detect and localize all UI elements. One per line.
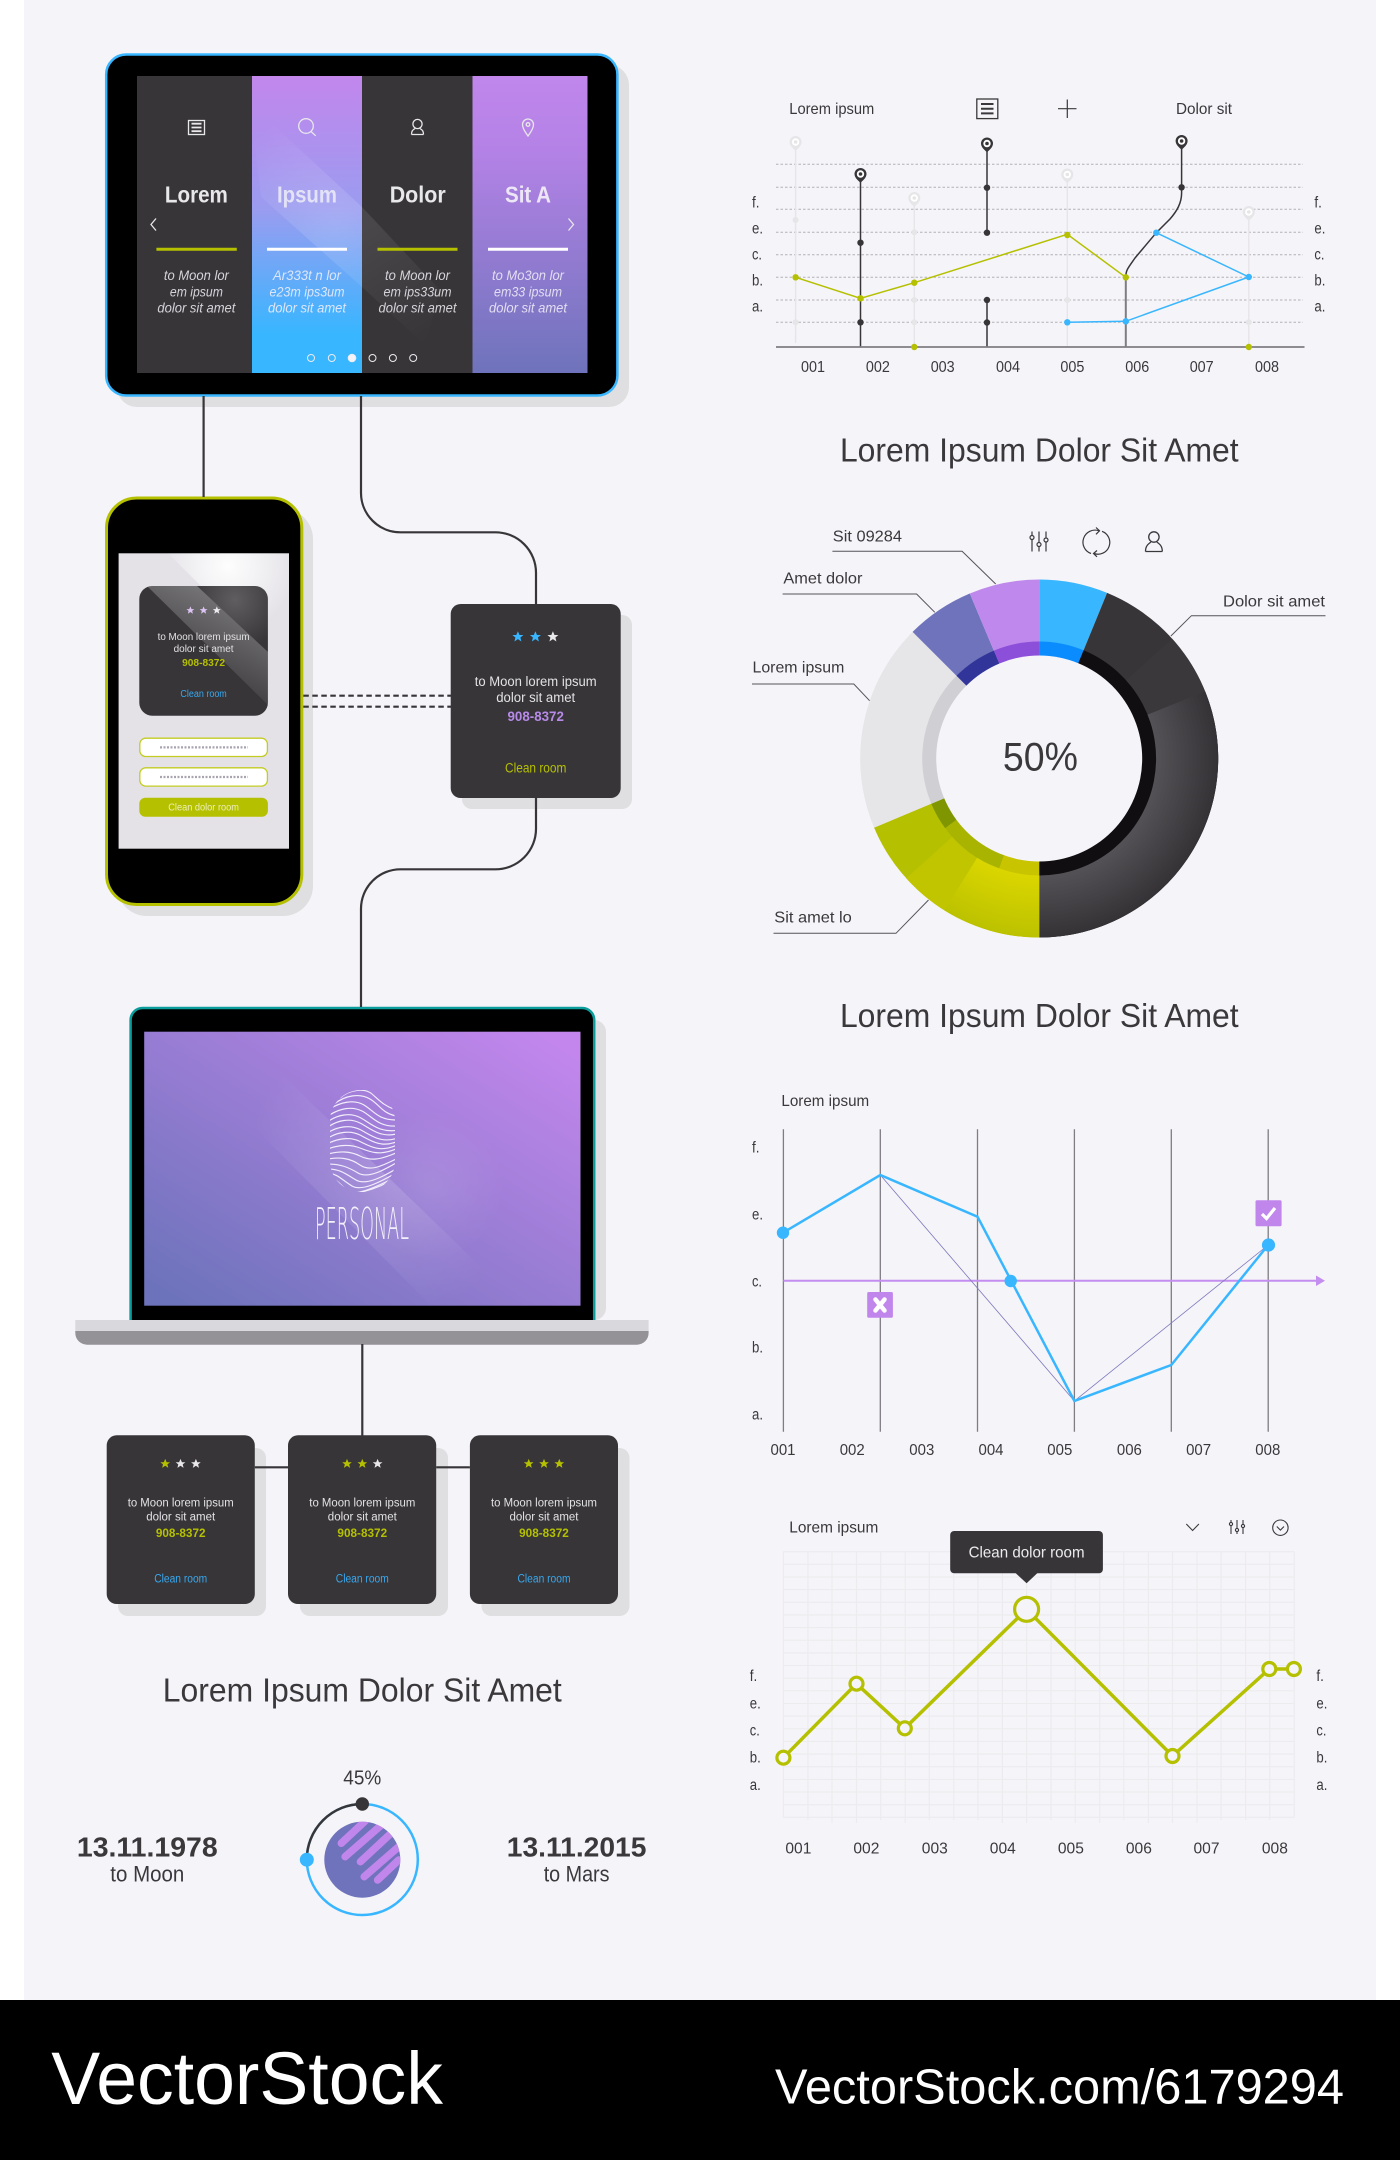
callout: Amet dolor: Amet dolor <box>783 570 863 587</box>
y axis labels: b. <box>750 1750 761 1767</box>
y axis labels: a. <box>1316 1777 1327 1794</box>
icon: person <box>1146 532 1162 552</box>
chart header label left: Lorem ipsum <box>789 101 874 118</box>
text: column 3 description <box>378 267 458 316</box>
title: left column: Lorem Ipsum Dolor Sit Amet <box>163 1673 562 1710</box>
x axis labels: 003 <box>909 1442 934 1459</box>
grid lines <box>776 164 1303 322</box>
y axis labels: c. <box>752 247 762 264</box>
x axis labels: 008 <box>1255 359 1279 376</box>
callout: Sit amet lo <box>774 900 928 933</box>
heading: Lorem column: Lorem <box>165 182 228 208</box>
lime data line <box>783 1609 1294 1758</box>
chart: donut <box>752 528 1326 938</box>
text: column 1 description: dolor sit amet <box>157 300 236 316</box>
text: column 2 description: e23m ips3um <box>270 284 345 300</box>
icon: chevron <box>1186 1524 1199 1530</box>
x axis labels: 002 <box>840 1442 865 1459</box>
stars <box>160 1459 201 1468</box>
heading: Sit A column: Sit A <box>505 182 551 208</box>
y axis labels: b. <box>752 1340 763 1357</box>
blue series line <box>1064 230 1252 325</box>
card text: 908-8372 <box>156 1528 206 1540</box>
text: column 4 description: em33 ipsum <box>494 284 562 300</box>
card text: dolor sit amet <box>328 1512 398 1524</box>
x axis labels <box>770 1442 1280 1459</box>
text: column 2 description: Ar333t n lor <box>272 267 342 283</box>
vertical grid lines <box>783 1129 1268 1432</box>
y axis labels <box>752 1139 763 1423</box>
card text: to Moon lorem ipsum <box>128 1498 234 1510</box>
chart: timeline pins <box>752 99 1325 376</box>
panel: tablet <box>106 54 629 407</box>
y axis labels: c. <box>750 1723 760 1740</box>
heading: Dolor column: Dolor <box>390 182 446 208</box>
tooltip: Clean dolor room <box>969 1544 1085 1561</box>
x axis labels: 007 <box>1190 359 1214 376</box>
x axis labels <box>785 1840 1288 1857</box>
text: end date <box>507 1832 646 1887</box>
donut segments <box>860 580 1218 938</box>
column divider rules <box>156 248 568 251</box>
x axis labels: 001 <box>785 1840 811 1857</box>
phone inner card <box>139 586 268 716</box>
x axis labels: 005 <box>1058 1840 1084 1857</box>
text: column 4 description: dolor sit amet <box>489 300 568 316</box>
text: column 3 description: to Moon lor <box>385 267 451 283</box>
baseline axis <box>776 346 1304 348</box>
arrow: threshold line <box>783 1276 1325 1286</box>
input field 1 <box>140 738 267 756</box>
x axis labels: 006 <box>1117 1442 1142 1459</box>
y axis labels <box>750 1668 1327 1794</box>
y axis labels: c. <box>1314 247 1324 264</box>
icon: search <box>299 119 316 136</box>
chart: lime line on grid <box>750 1519 1327 1857</box>
card text: 908-8372 <box>508 709 564 724</box>
text: column 1 description <box>157 267 236 316</box>
panel: card 3 <box>470 1435 630 1616</box>
x axis labels: 008 <box>1262 1840 1288 1857</box>
x axis labels: 007 <box>1194 1840 1220 1857</box>
card text: Clean room <box>180 689 227 700</box>
card text <box>128 1498 234 1585</box>
percent label: 45% <box>343 1767 382 1789</box>
y axis labels: b. <box>752 272 763 289</box>
panel: phone <box>106 498 313 916</box>
text: start date: to Moon <box>110 1862 184 1887</box>
x axis labels: 001 <box>801 359 825 376</box>
chart label: Lorem ipsum <box>781 1093 869 1110</box>
y axis labels <box>752 195 1325 315</box>
x axis labels: 002 <box>853 1840 879 1857</box>
x axis labels: 006 <box>1125 359 1149 376</box>
x axis labels: 005 <box>1047 1442 1072 1459</box>
icon: person <box>412 119 424 134</box>
blue data line <box>783 1175 1268 1401</box>
callout: Dolor sit amet: Dolor sit amet <box>1223 594 1326 611</box>
text: column 2 description <box>268 267 347 316</box>
card text: 908-8372 <box>337 1528 387 1540</box>
card text <box>475 674 597 776</box>
card text: dolor sit amet <box>496 690 575 705</box>
y axis labels: f. <box>1316 1668 1324 1685</box>
card text: Clean room <box>336 1573 389 1585</box>
callout: Sit 09284 <box>832 529 996 584</box>
card text <box>158 632 250 700</box>
x axis labels: 001 <box>770 1442 796 1459</box>
callout: Lorem ipsum: Lorem ipsum <box>752 660 844 677</box>
data points <box>777 1597 1300 1764</box>
icon: menu <box>977 99 998 119</box>
icon: left arrow <box>151 218 156 230</box>
progress orbit gauge <box>300 1767 418 1915</box>
callout: Amet dolor <box>783 570 935 612</box>
card text <box>491 1498 597 1585</box>
x axis labels: 004 <box>978 1442 1004 1459</box>
y axis labels: f. <box>750 1668 757 1685</box>
dark pin series <box>854 135 1188 347</box>
icon: location pin <box>522 119 534 136</box>
chart grid <box>783 1552 1294 1823</box>
y axis labels: f. <box>752 195 760 212</box>
icon: plus <box>1058 100 1076 118</box>
panel: laptop <box>75 1008 649 1345</box>
data points <box>777 1226 1275 1287</box>
input field 2 <box>140 768 267 786</box>
x axis labels <box>801 359 1279 376</box>
card text: to Moon lorem ipsum <box>491 1498 597 1510</box>
y axis labels: e. <box>750 1695 761 1712</box>
laptop base <box>75 1320 649 1345</box>
panel: laptop: PERSONAL <box>315 1199 409 1250</box>
card text <box>309 1498 415 1585</box>
callout: Dolor sit amet <box>1171 594 1326 636</box>
button <box>139 798 268 817</box>
title: timeline chart: Lorem Ipsum Dolor Sit Amet <box>840 432 1239 469</box>
panel: dark info card <box>451 604 632 809</box>
y axis labels: c. <box>1316 1723 1326 1740</box>
y axis labels: f. <box>1314 195 1322 212</box>
text: start date <box>77 1832 218 1887</box>
lime series line <box>792 232 1252 350</box>
icon: circled chevron <box>1273 1520 1288 1535</box>
text: column 4 description: to Mo3on lor <box>492 267 565 283</box>
watermark logo text: VectorStock <box>51 2037 444 2120</box>
text: column 2 description: dolor sit amet <box>268 300 347 316</box>
x axis labels: 004 <box>996 359 1020 376</box>
icon: sliders <box>1229 1520 1245 1534</box>
y axis labels: a. <box>750 1777 761 1794</box>
text: column 3 description: dolor sit amet <box>378 300 458 316</box>
text: column 1 description: to Moon lor <box>164 267 230 283</box>
callout: Sit amet lo: Sit amet lo <box>774 910 852 927</box>
text: column 1 description: em ipsum <box>170 284 223 300</box>
x axis labels: 008 <box>1255 1442 1280 1459</box>
callout: Sit 09284: Sit 09284 <box>833 529 902 546</box>
text: end date: to Mars <box>544 1862 609 1887</box>
icon: purple check badge <box>1256 1200 1282 1226</box>
y axis labels: a. <box>752 1406 763 1423</box>
x axis labels: 003 <box>931 359 955 376</box>
y axis labels: b. <box>1314 272 1325 289</box>
text: column 3 description: em ips33um <box>384 284 452 300</box>
title: donut chart: Lorem Ipsum Dolor Sit Amet <box>840 998 1239 1035</box>
footer watermark bar <box>0 2000 1400 2160</box>
icon: menu <box>188 120 204 134</box>
stars <box>342 1459 382 1468</box>
y axis labels: b. <box>1316 1750 1327 1767</box>
x axis labels: 003 <box>922 1840 948 1857</box>
x axis labels: 005 <box>1060 359 1084 376</box>
y axis labels: a. <box>1314 298 1325 315</box>
text: column 4 description <box>489 267 568 316</box>
card text: 908-8372 <box>182 658 226 669</box>
thin reference line <box>880 1175 1268 1401</box>
chart header label right: Dolor sit <box>1176 101 1233 118</box>
callout: Lorem ipsum <box>752 660 870 701</box>
x axis labels: 006 <box>1126 1840 1152 1857</box>
panel: card 1 <box>107 1435 266 1616</box>
card text: dolor sit amet <box>174 644 234 655</box>
card text: Clean room <box>154 1573 207 1585</box>
watermark url: VectorStock.com/6179294 <box>775 2059 1344 2114</box>
x axis labels: 004 <box>990 1840 1016 1857</box>
card text: 908-8372 <box>519 1528 569 1540</box>
card text: to Moon lorem ipsum <box>158 632 250 643</box>
y axis labels: e. <box>1314 221 1325 238</box>
card text: Clean room <box>518 1573 570 1585</box>
stars <box>186 606 221 614</box>
icon: fingerprint <box>328 1090 396 1194</box>
icon: right arrow <box>568 218 574 230</box>
y axis labels: a. <box>752 298 763 315</box>
stars <box>512 631 558 642</box>
text: end date: 13.11.2015 <box>507 1832 646 1863</box>
card text: to Moon lorem ipsum <box>475 674 597 689</box>
chart: blue line with threshold <box>752 1093 1325 1459</box>
text: start date: 13.11.1978 <box>77 1832 218 1863</box>
connector lines between devices <box>204 396 536 1467</box>
icon: refresh <box>1083 528 1110 557</box>
x axis labels: 002 <box>866 359 890 376</box>
carousel pagination dots <box>308 354 417 362</box>
tooltip <box>950 1531 1103 1583</box>
y axis labels: e. <box>1316 1695 1327 1712</box>
center value: 50% <box>1003 736 1078 780</box>
icon: sliders <box>1030 532 1048 552</box>
faded pin series <box>790 136 1255 347</box>
chart label: Lorem ipsum <box>789 1519 878 1536</box>
button: Clean dolor room <box>168 803 239 814</box>
planet <box>324 1820 400 1898</box>
heading: Ipsum column: Ipsum <box>277 182 337 208</box>
card text: dolor sit amet <box>510 1512 579 1524</box>
y axis labels: c. <box>752 1274 762 1291</box>
panel: card 2 <box>288 1435 448 1616</box>
y axis labels: e. <box>752 1206 763 1223</box>
icon: purple cross badge <box>867 1292 893 1318</box>
card text: to Moon lorem ipsum <box>309 1498 415 1510</box>
card text: Clean room <box>505 761 566 776</box>
y axis labels: f. <box>752 1139 760 1156</box>
x axis labels: 007 <box>1186 1442 1211 1459</box>
card text: dolor sit amet <box>146 1512 216 1524</box>
stars <box>524 1459 564 1468</box>
y axis labels: e. <box>752 221 763 238</box>
